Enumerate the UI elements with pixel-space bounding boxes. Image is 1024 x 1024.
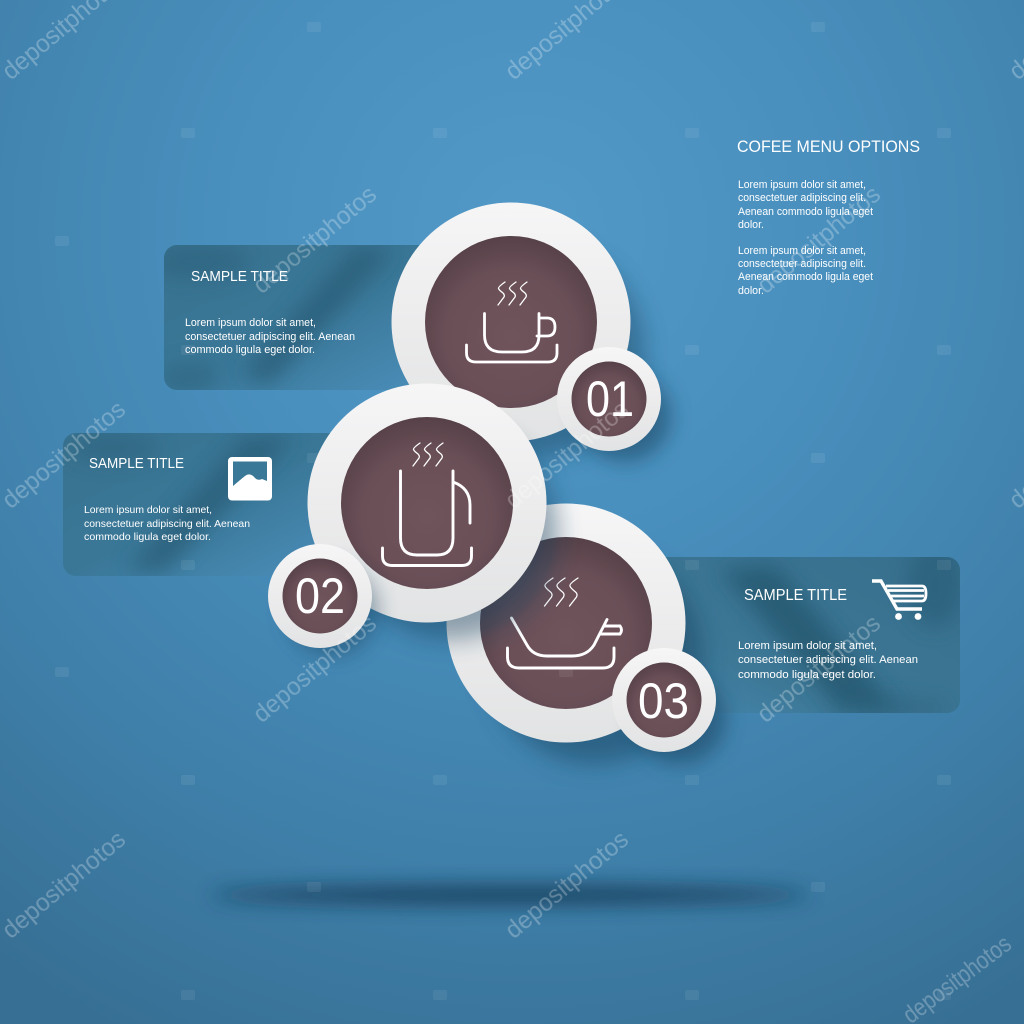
badge 02: [268, 544, 378, 656]
text block: panel 3 body: [738, 640, 918, 681]
watermark: stock photo marks: depositphotos: [248, 180, 382, 299]
watermark: stock photo marks: depositphotos: [500, 395, 634, 514]
badge 01: 01: [586, 371, 634, 427]
text block: panel 2 body: Lorem ipsum dolor sit amet,: [84, 505, 212, 516]
text block: panel 1 body: [185, 317, 355, 356]
watermark: stock photo marks: depositphotos: [500, 825, 634, 944]
text block: menu intro: consectetuer adipiscing elit.: [738, 192, 866, 204]
badge 02: 02: [295, 568, 345, 624]
circle 3 with wide cup: [446, 504, 702, 764]
icon: picture: [228, 457, 272, 500]
watermark: stock photo marks: depositphotos: [0, 395, 131, 514]
text block: panel 1 body: Lorem ipsum dolor sit amet,: [185, 317, 316, 329]
panel: sample title 2: [63, 433, 353, 576]
text block: menu intro: Aenean commodo ligula eget: [738, 206, 873, 218]
watermark: stock photo marks: depositphotos: [0, 825, 131, 944]
badge 03: [612, 648, 726, 764]
watermark: stock photo marks: depositphotos: [752, 609, 886, 728]
ground shadow: [210, 886, 810, 904]
heading: coffee menu options: COFEE MENU OPTIONS: [737, 138, 920, 156]
watermark: stock photo marks: depositphotos: [752, 180, 886, 299]
icon: wide coffee cup: [508, 578, 622, 668]
circle 1 with cup: [392, 202, 644, 458]
icon: shopping cart: [872, 581, 926, 620]
text block: menu intro: [738, 179, 873, 231]
panel: sample title 3: [666, 557, 960, 713]
text block: menu details: consectetuer adipiscing elit.: [738, 258, 866, 270]
text block: panel 1 body: consectetuer adipiscing elit. Aenean: [185, 331, 355, 343]
heading: panel 2 title: SAMPLE TITLE: [89, 456, 184, 472]
text block: panel 3 body: consectetuer adipiscing elit. Aenean: [738, 654, 918, 666]
badge 03: 03: [638, 673, 689, 729]
text block: menu details: dolor.: [738, 285, 764, 297]
text block: panel 2 body: [84, 505, 250, 543]
text block: menu details: [738, 245, 873, 297]
icon: coffee cup: [466, 282, 557, 362]
heading: panel 3 title: SAMPLE TITLE: [744, 587, 847, 604]
text block: panel 3 body: commodo ligula eget dolor.: [738, 669, 876, 681]
text block: menu details: Aenean commodo ligula eget: [738, 271, 873, 283]
text block: panel 1 body: commodo ligula eget dolor.: [185, 344, 315, 356]
panel: sample title 1: [164, 245, 420, 390]
text block: menu intro: dolor.: [738, 219, 764, 231]
heading: panel 1 title: SAMPLE TITLE: [191, 268, 288, 285]
text block: panel 3 body: Lorem ipsum dolor sit amet,: [738, 640, 877, 652]
icon: tall mug: [382, 443, 472, 566]
circle 2 with mug: [308, 384, 558, 640]
badge 01: [557, 347, 671, 462]
watermark: stock photo marks: depositphotos: [248, 609, 382, 728]
text block: menu intro: Lorem ipsum dolor sit amet,: [738, 179, 866, 191]
text block: panel 2 body: consectetuer adipiscing elit. Aenean: [84, 519, 250, 530]
text block: panel 2 body: commodo ligula eget dolor.: [84, 532, 211, 543]
text block: menu details: Lorem ipsum dolor sit amet,: [738, 245, 866, 257]
